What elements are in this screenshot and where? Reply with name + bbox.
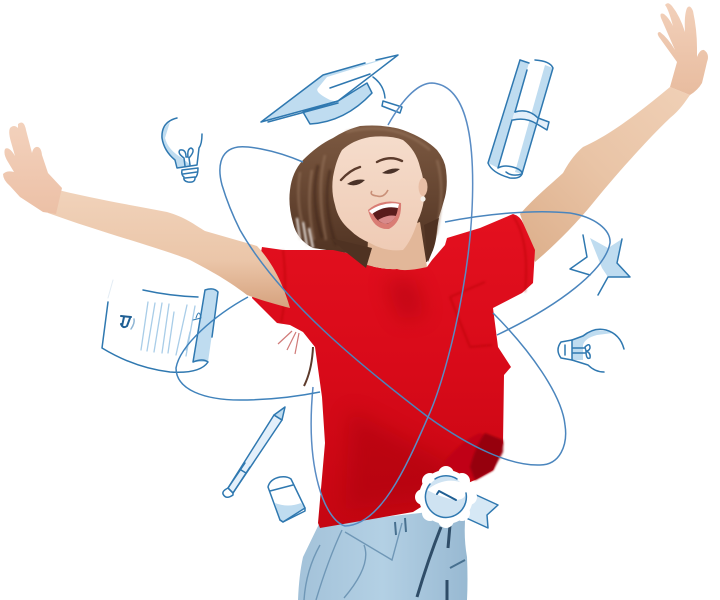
icon: award rosette (415, 466, 498, 528)
face (332, 136, 424, 250)
ear (418, 178, 428, 196)
icon: graduation cap (261, 55, 402, 124)
hair tips over the shirt (330, 218, 439, 268)
dark inner fold (470, 433, 503, 480)
hair highlights (298, 129, 441, 240)
orbit: tilted vertical ellipse (311, 83, 473, 526)
shirt fold shadows (345, 276, 446, 508)
hair back (289, 126, 447, 267)
icon: pencil (223, 407, 285, 497)
orbit: horizontal ellipse, left part (176, 297, 320, 400)
orbit: horizontal ellipse, right part (445, 212, 610, 335)
icon: star (570, 235, 630, 295)
right arm (520, 87, 690, 262)
eyebrows (341, 158, 402, 180)
icon: light bulb, right (558, 329, 624, 372)
right hand (658, 3, 708, 95)
nose (371, 190, 388, 196)
icon: eraser (268, 477, 305, 522)
icon: diploma scroll (488, 60, 553, 178)
left hand (3, 122, 62, 214)
red t-shirt (252, 214, 535, 528)
open mouth (368, 202, 401, 229)
neck (367, 222, 427, 270)
icon: certificate document (102, 280, 218, 372)
stray hair below the sleeve (278, 331, 299, 354)
icon: light bulb, upper left (162, 118, 202, 182)
left arm (48, 188, 290, 308)
orbit: diagonal ellipse (220, 147, 566, 465)
eyes (347, 168, 400, 185)
jeans (298, 508, 468, 600)
